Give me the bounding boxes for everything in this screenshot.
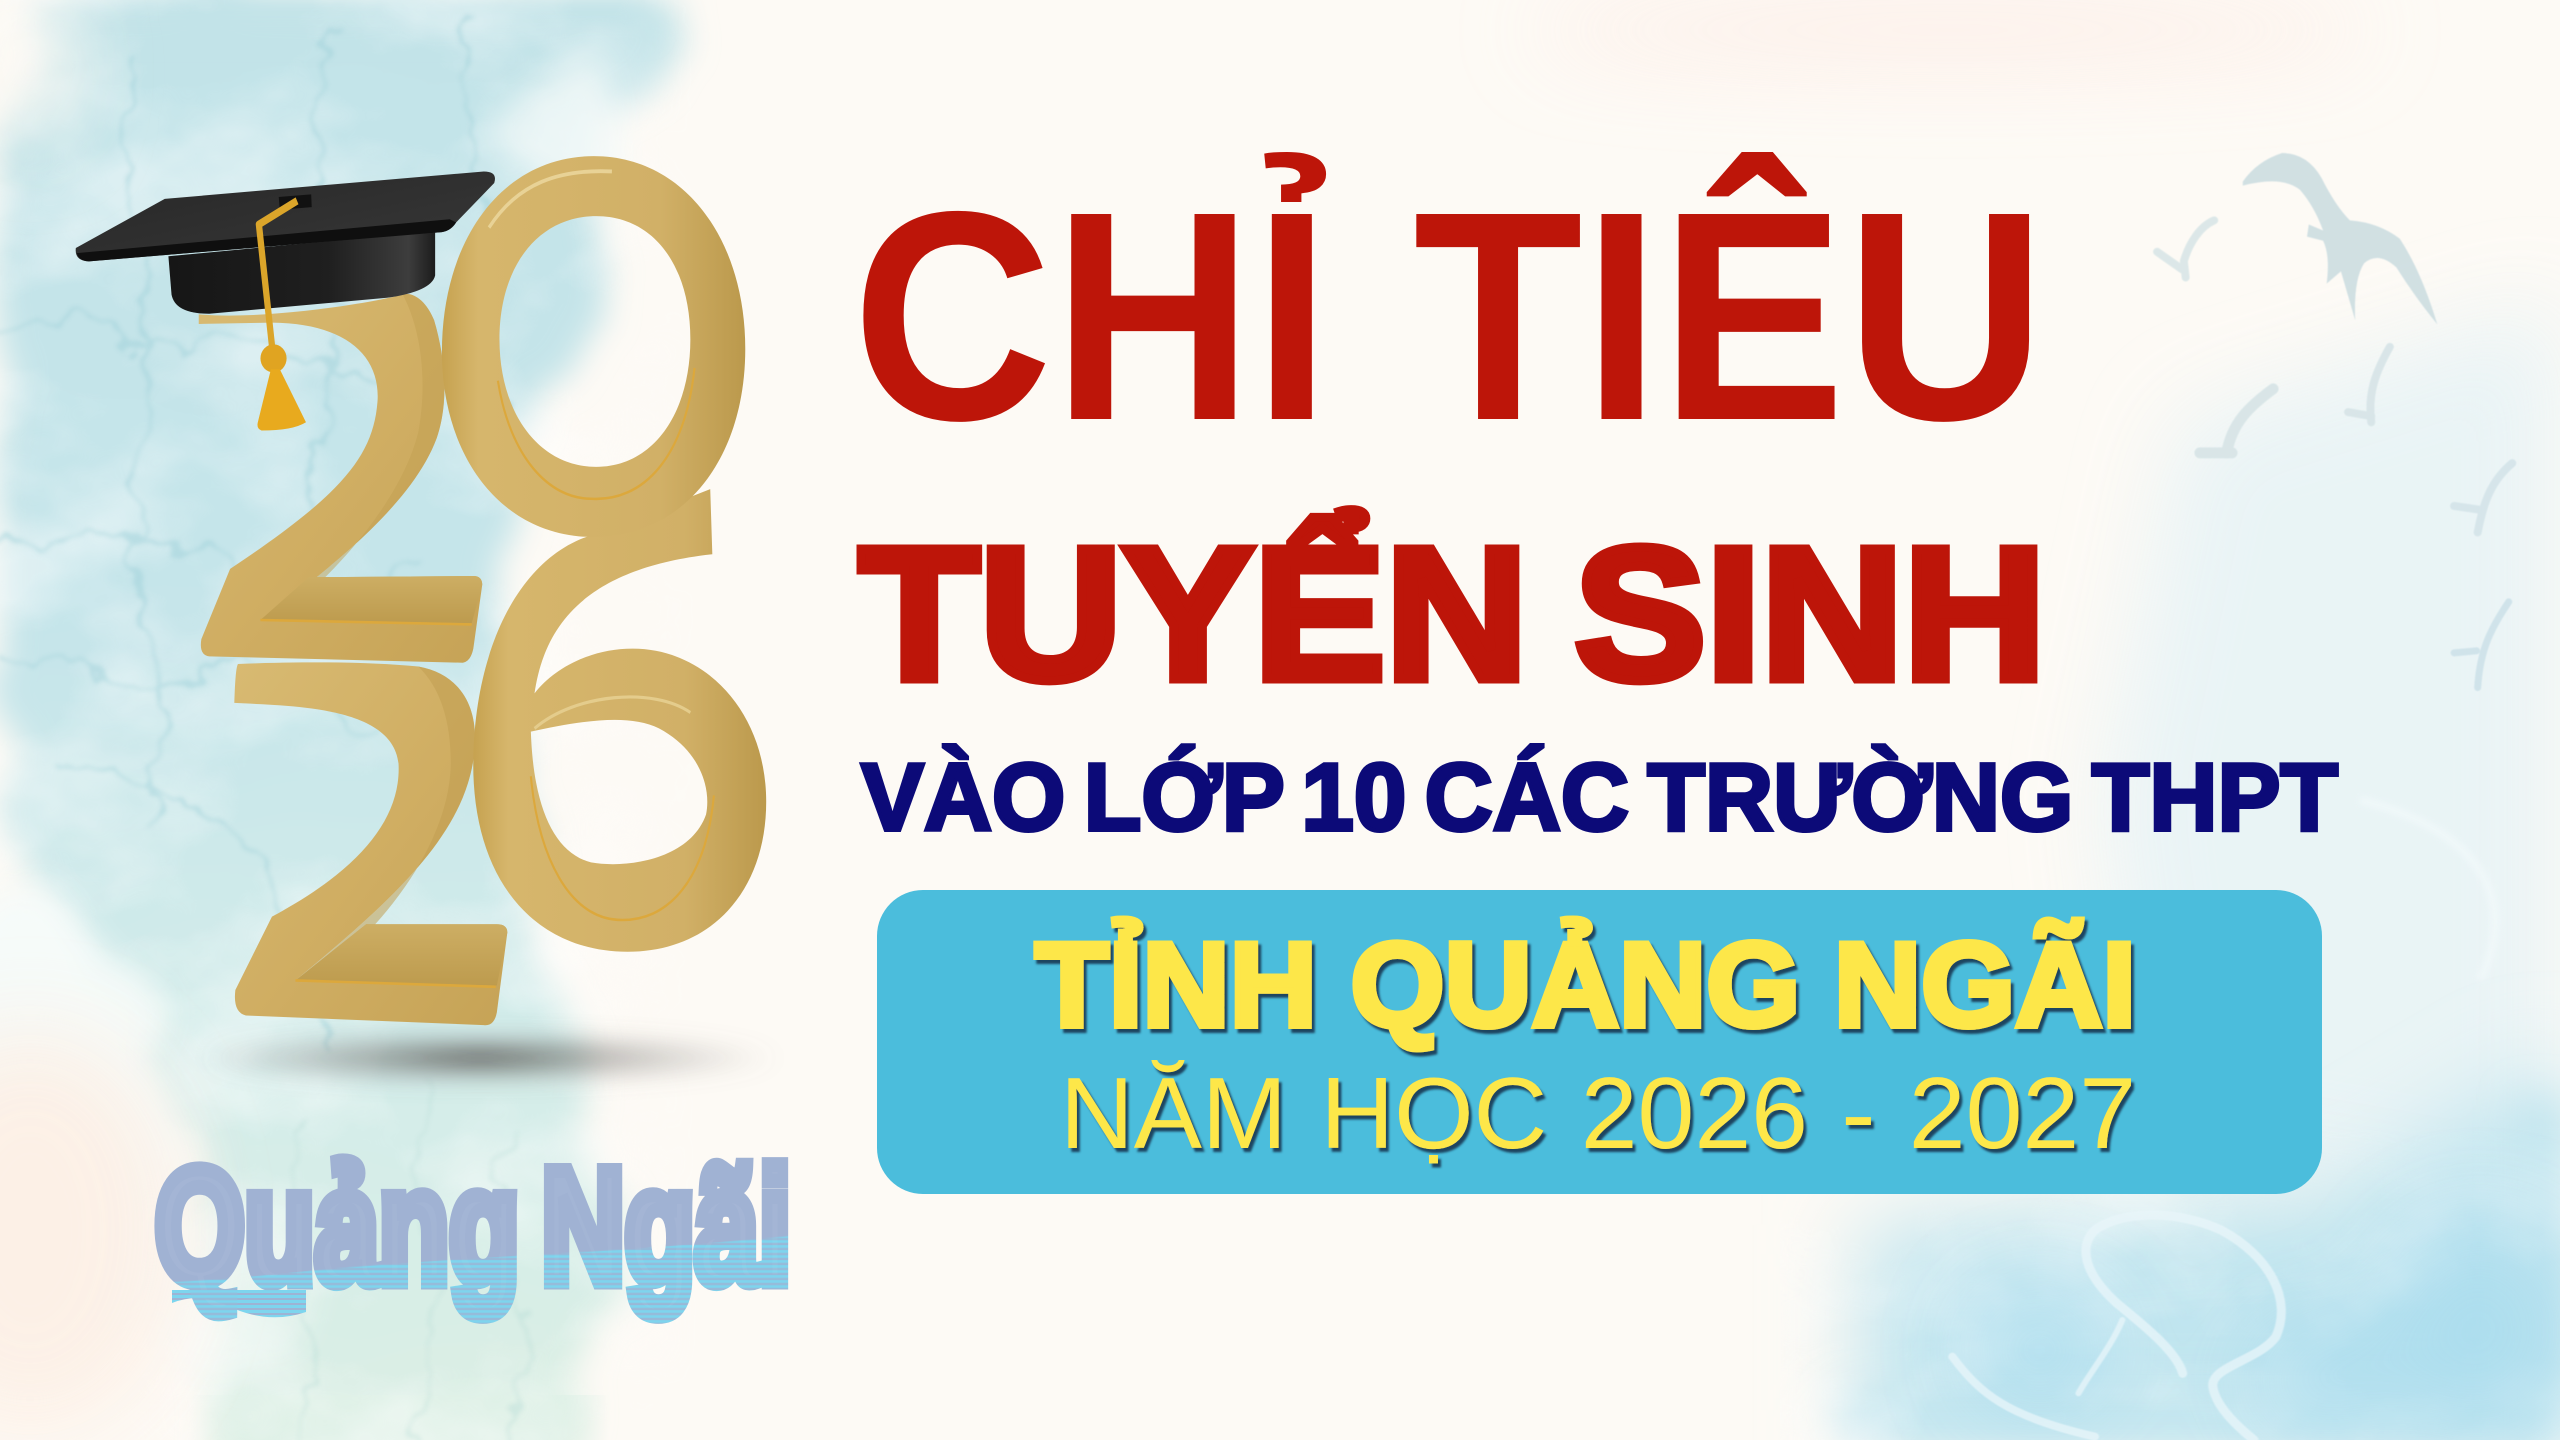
background: faint right swirl [2360, 800, 2495, 980]
background: top-left cream corner [0, 0, 60, 140]
background: bottom-right blue watercolor wash [1860, 1060, 2560, 1440]
background: pale left-edge patches [0, 60, 625, 1370]
bird: centre right [2348, 347, 2390, 422]
background: lower-left green veins [295, 1090, 520, 1440]
cap skull [168, 231, 435, 314]
panel title: TỈNH QUẢNG NGÃI: TỈNH QUẢNG NGÃI [1035, 917, 2136, 1052]
background: wash bottom edge strip [190, 1395, 610, 1440]
background: pale mottling over left wash [0, 0, 700, 1440]
background: wash top edge strip [70, 0, 650, 34]
decorative flock of birds [2157, 153, 2512, 688]
panel background [877, 890, 2322, 1194]
background: left teal watercolor wash [0, 0, 690, 1440]
cap board [76, 171, 495, 261]
tassel skirt [257, 369, 306, 430]
floor shadow under 2026 [210, 1032, 810, 1084]
panel: province and school year [877, 890, 2322, 1194]
logo wave under text [172, 1290, 306, 1317]
graduation cap [76, 171, 495, 430]
digit: upper 2 [199, 294, 482, 663]
tassel knob [260, 344, 287, 372]
heading: CHỈ TIÊU: CHỈ TIÊU [852, 149, 2046, 483]
subheading: VÀO LỚP 10 CÁC TRƯỜNG THPT: VÀO LỚP 10 CÁC TRƯỜNG THPT [861, 744, 2338, 851]
panel subtitle: NĂM HỌC 2026 - 2027: NĂM HỌC 2026 - 2027 [1060, 1058, 2136, 1170]
background: right pale blue haze [2100, 300, 2560, 1220]
digit: 0 [442, 156, 745, 537]
bird: small upper left [2157, 220, 2214, 277]
background: pale mottling over right wash [1780, 1120, 2560, 1440]
bird: large gull [2243, 153, 2437, 324]
background: bottom-right edge strip [1840, 1395, 2560, 1440]
gold 3D number 2026 with graduation cap [76, 156, 766, 1025]
digit: lower 2 [234, 662, 507, 1025]
tassel cord [259, 201, 297, 346]
background: watercolor veins [0, 10, 510, 1040]
background: white swirl lines [1952, 1215, 2281, 1440]
bird: right [2454, 463, 2512, 532]
heading: TUYỂN SINH: TUYỂN SINH [859, 509, 2046, 720]
background: pink corner tint [0, 1030, 180, 1430]
background: right-edge strip [2520, 1100, 2560, 1440]
logo wordmark: Quảng Ngãi [155, 1136, 791, 1317]
cap button [279, 194, 312, 210]
background: top pink tint [1530, 0, 2370, 60]
background: deeper blue streaks [1970, 1220, 2560, 1440]
digit: 6 [473, 489, 766, 952]
logo: Quảng Ngãi [155, 1136, 791, 1317]
bird: lower right [2454, 602, 2509, 688]
bird: lower centre [2200, 389, 2273, 453]
